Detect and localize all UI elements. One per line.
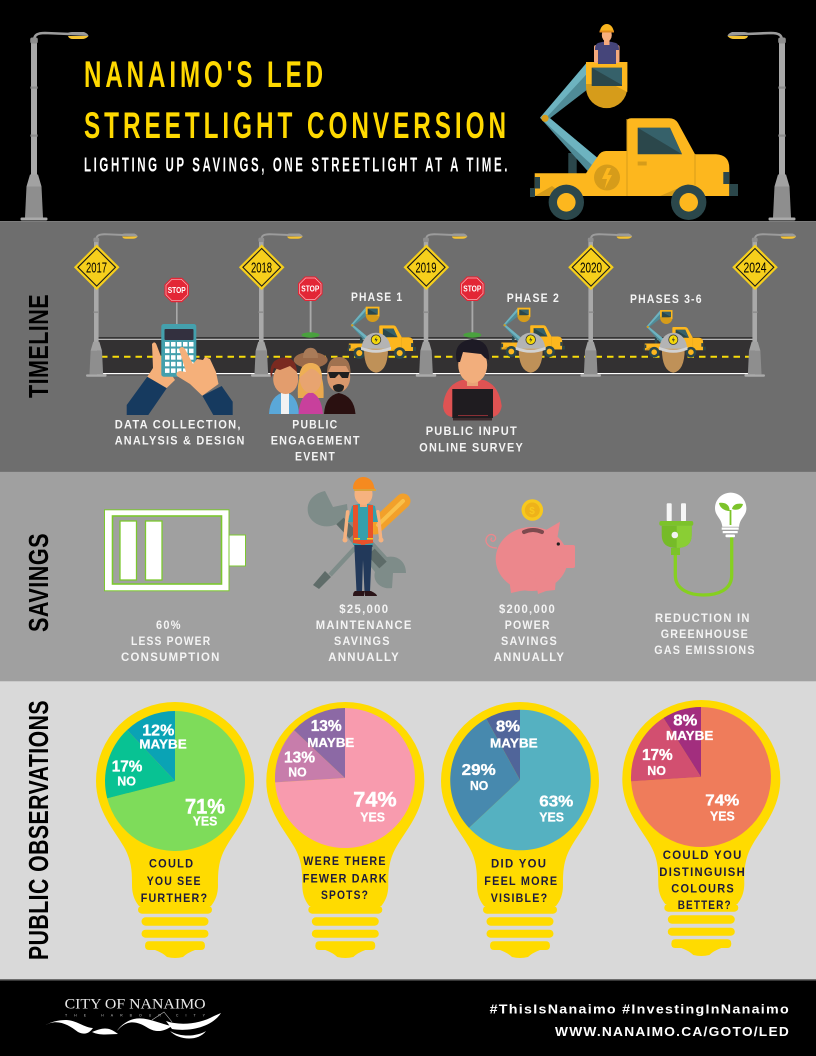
icon: stop sign 2017-2018 bbox=[164, 278, 189, 326]
icon: stop sign 2019-2020 bbox=[460, 276, 485, 338]
chart: could you distinguish colours better: BETTER? bbox=[678, 898, 732, 912]
label: public input online survey bbox=[419, 424, 524, 455]
marker: 2017: 2017 bbox=[86, 260, 107, 276]
label: reduction in emissions bbox=[654, 611, 756, 657]
panel: footer bbox=[0, 979, 816, 1056]
panel: savings bbox=[0, 472, 816, 681]
chart: were there fewer dark spots: 13% bbox=[284, 749, 315, 766]
icon: hands and calculator bbox=[127, 324, 233, 415]
icon: stop sign 2018-2019 bbox=[298, 276, 323, 338]
label: $200,000 power: SAVINGS bbox=[501, 634, 558, 648]
icon: left street lamp bbox=[20, 32, 88, 220]
label: reduction in emissions: GREENHOUSE bbox=[661, 627, 749, 641]
label: data collection: DATA COLLECTION, bbox=[115, 417, 242, 431]
chart: could you distinguish colours better: DISTINGUISH bbox=[659, 865, 746, 879]
label: phase 2: PHASE 2 bbox=[507, 291, 560, 305]
label: 60% less power: CONSUMPTION bbox=[121, 650, 221, 664]
marker: 2019 bbox=[404, 233, 467, 377]
heading: savings: SAVINGS bbox=[23, 533, 54, 632]
chart: did you feel more visible bbox=[441, 702, 599, 958]
label: data collection bbox=[115, 417, 246, 447]
chart: could you see further: YOU SEE bbox=[147, 874, 202, 888]
label: phases 3-6: PHASES 3-6 bbox=[630, 292, 703, 306]
label: public input online survey: ONLINE SURVEY bbox=[419, 441, 524, 455]
chart: could you see further: 17% bbox=[112, 759, 143, 776]
chart: could you see further: YES bbox=[193, 814, 218, 829]
label: $25,000 maintenance bbox=[316, 602, 413, 664]
panel: public observations bbox=[0, 681, 816, 979]
chart: could you distinguish colours better: YES bbox=[710, 809, 735, 824]
chart: could you see further: 71% bbox=[185, 796, 225, 819]
label: public engagement event: EVENT bbox=[295, 449, 336, 463]
icon: battery bbox=[104, 510, 246, 591]
icon: truck phase 1 bbox=[347, 307, 416, 359]
title: STREETLIGHT CONVERSION bbox=[84, 105, 510, 146]
marker: 2018: 2018 bbox=[251, 260, 272, 276]
chart: could you see further: NO bbox=[117, 774, 136, 789]
icon: bucket truck bbox=[530, 62, 738, 220]
icon: worker in bucket bbox=[594, 24, 620, 64]
label: reduction in emissions: GAS EMISSIONS bbox=[654, 643, 756, 657]
chart: could you distinguish colours better: 74% bbox=[705, 793, 740, 810]
icon: plug and eco bulb bbox=[659, 493, 746, 595]
chart: could you distinguish colours better: COLOURS bbox=[671, 881, 735, 895]
road bbox=[97, 337, 755, 375]
title bbox=[84, 54, 510, 146]
chart: were there fewer dark spots: 74% bbox=[353, 788, 397, 811]
logo: City of Nanaimo: CITY OF NANAIMO bbox=[65, 996, 206, 1012]
icon: hard hat phase 2 bbox=[516, 333, 546, 373]
chart: were there fewer dark spots: WERE THERE bbox=[303, 854, 387, 868]
label: 60% less power: LESS POWER bbox=[131, 634, 211, 648]
chart: could you see further: 12% bbox=[142, 723, 175, 740]
chart: could you distinguish colours better: 8% bbox=[673, 713, 698, 730]
website: WWW.NANAIMO.CA/GOTO/LED bbox=[555, 1024, 790, 1039]
label: $25,000 maintenance: MAINTENANCE bbox=[316, 618, 413, 632]
chart: could you see further bbox=[96, 702, 254, 958]
label: $200,000 power: POWER bbox=[505, 618, 551, 632]
label: $25,000 maintenance: SAVINGS bbox=[334, 634, 391, 648]
label: $200,000 power: ANNUALLY bbox=[494, 650, 565, 664]
chart: did you feel more visible: 29% bbox=[462, 762, 496, 779]
icon: piggy bank: $ bbox=[529, 506, 535, 517]
icon: right street lamp bbox=[728, 32, 796, 220]
label: reduction in emissions: REDUCTION IN bbox=[655, 611, 751, 625]
chart: did you feel more visible: NO bbox=[470, 778, 488, 793]
logo: City of Nanaimo: THE HARBOUR CITY bbox=[65, 1014, 206, 1018]
chart: could you distinguish colours better: NO bbox=[647, 763, 666, 778]
icon: person at laptop bbox=[443, 339, 502, 420]
label: $25,000 maintenance: ANNUALLY bbox=[328, 650, 400, 664]
chart: were there fewer dark spots: SPOTS? bbox=[321, 888, 369, 902]
marker: 2020: 2020 bbox=[580, 260, 602, 276]
logo: City of Nanaimo bbox=[44, 996, 221, 1039]
hashtags: #ThisIsNanaimo #InvestingInNanaimo bbox=[490, 1001, 790, 1016]
icon: worker with tools bbox=[308, 477, 406, 596]
heading: public observations: PUBLIC OBSERVATIONS bbox=[23, 700, 54, 960]
label: public input online survey: PUBLIC INPUT bbox=[426, 424, 518, 438]
label: data collection: ANALYSIS & DESIGN bbox=[115, 433, 246, 447]
marker: 2017 bbox=[74, 233, 138, 377]
panel: timeline bbox=[0, 221, 816, 472]
chart: did you feel more visible: VISIBLE? bbox=[491, 891, 548, 905]
title: NANAIMO'S LED bbox=[84, 54, 327, 95]
chart: did you feel more visible: MAYBE bbox=[490, 736, 538, 751]
label: public engagement event: PUBLIC bbox=[292, 417, 338, 431]
chart: could you see further: FURTHER? bbox=[141, 891, 208, 905]
label: public engagement event bbox=[271, 417, 361, 463]
chart: did you feel more visible: 63% bbox=[539, 794, 574, 811]
label: $200,000 power bbox=[494, 602, 565, 664]
panel: header bbox=[0, 0, 816, 221]
chart: could you distinguish colours better: 17% bbox=[642, 747, 673, 764]
chart: did you feel more visible: FEEL MORE bbox=[484, 874, 558, 888]
chart: could you see further: COULD bbox=[149, 857, 194, 871]
icon: truck phase 2 bbox=[500, 308, 565, 357]
chart: were there fewer dark spots: MAYBE bbox=[307, 735, 355, 750]
marker: 2019: 2019 bbox=[416, 260, 436, 276]
icon: three people bbox=[269, 348, 356, 414]
icon: truck phases 3-6 bbox=[643, 310, 706, 358]
marker: 2020 bbox=[568, 233, 632, 377]
marker: 2024 bbox=[732, 233, 796, 377]
label: phase 1: PHASE 1 bbox=[351, 290, 403, 304]
chart: were there fewer dark spots: YES bbox=[360, 810, 385, 825]
chart: could you see further: MAYBE bbox=[139, 736, 187, 751]
chart: were there fewer dark spots: FEWER DARK bbox=[303, 871, 388, 885]
label: $25,000 maintenance: $25,000 bbox=[339, 602, 389, 616]
icon: hard hat phases 3-6 bbox=[659, 333, 688, 373]
chart: could you distinguish colours better bbox=[622, 700, 780, 956]
subtitle: LIGHTING UP SAVINGS, ONE STREETLIGHT AT A TIME. bbox=[84, 154, 510, 176]
chart: did you feel more visible: DID YOU bbox=[491, 857, 547, 871]
chart: did you feel more visible: 8% bbox=[496, 719, 520, 736]
label: 60% less power bbox=[121, 618, 221, 664]
marker: 2024: 2024 bbox=[744, 260, 766, 276]
heading: timeline: TIMELINE bbox=[23, 294, 54, 398]
chart: were there fewer dark spots bbox=[266, 702, 424, 958]
chart: were there fewer dark spots: NO bbox=[288, 765, 307, 780]
chart: could you distinguish colours better: COULD YOU bbox=[663, 848, 743, 862]
label: $200,000 power: $200,000 bbox=[499, 602, 556, 616]
chart: did you feel more visible: YES bbox=[539, 810, 564, 825]
icon: hard hat phase 1 bbox=[361, 333, 391, 373]
label: public engagement event: ENGAGEMENT bbox=[271, 433, 361, 447]
label: 60% less power: 60% bbox=[156, 618, 182, 632]
chart: could you distinguish colours better: MAYBE bbox=[666, 728, 714, 743]
icon: piggy bank bbox=[486, 499, 575, 594]
chart: were there fewer dark spots: 13% bbox=[311, 718, 342, 735]
marker: 2018 bbox=[239, 233, 303, 377]
